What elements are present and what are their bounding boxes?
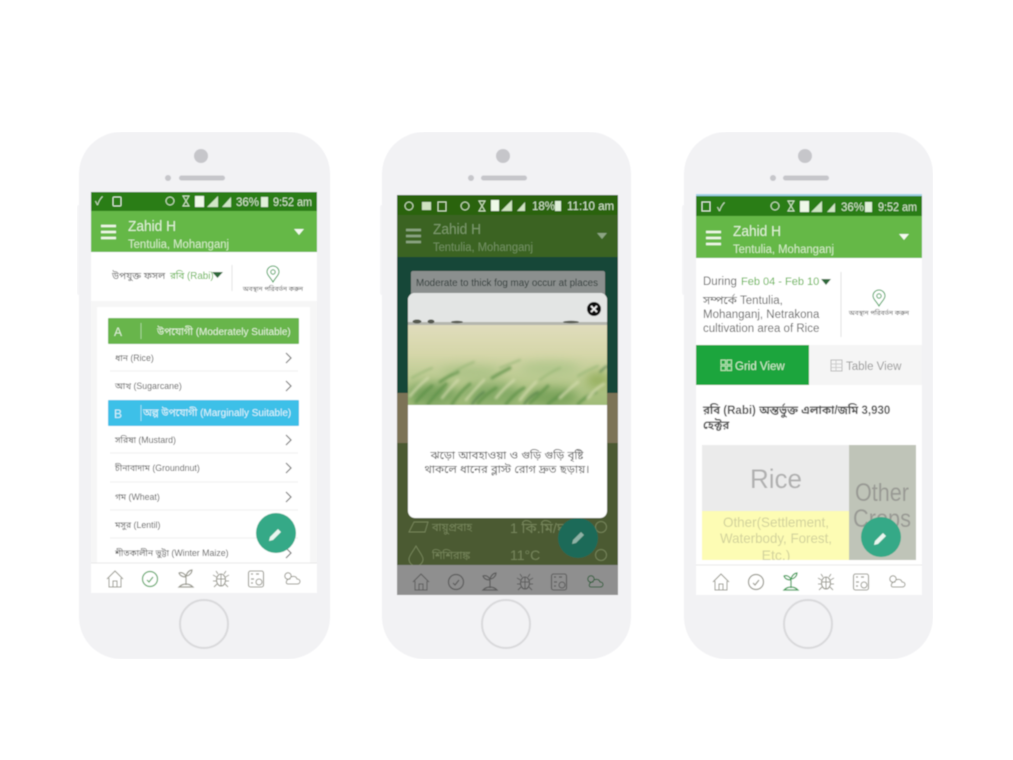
app header [696,216,922,258]
status bar: ✓ [717,202,725,214]
camera and speaker [468,149,527,181]
marginal crops: মসুর (Lentil) [114,520,161,531]
status bar: 9:52 am [878,202,917,214]
dimmed header [397,215,618,257]
date and location summary: অবস্থান পরিবর্তন করুন [848,309,909,317]
marginal crops: সরিষা (Mustard) [114,434,176,445]
treemap [702,445,916,563]
category B bar [108,400,299,426]
area heading: রবি (Rabi) অন্তর্ভুক্ত এলাকা/জমি 3,930 [702,403,890,417]
popup message [424,449,590,476]
phone body [77,132,330,659]
category A bar [108,318,299,344]
crop list card [97,307,310,563]
marginal crops: চীনাবাদাম (Groundnut) [114,462,200,473]
marginal crops: গম (Wheat) [115,492,160,502]
status bar: 18% [532,201,555,213]
camera and speaker [770,149,829,181]
status bar [696,194,922,216]
status bar: 9:52 am [273,197,312,209]
status bar [91,192,317,211]
dimmed header: Tentulia, Mohanganj [433,242,533,254]
status bar: ✓ [95,196,103,208]
season selector row: রবি (Rabi) [169,270,214,282]
dimmed bottom navigation [397,565,618,595]
home button [482,600,530,648]
app header [91,211,317,252]
view tabs [696,345,922,385]
popup card [406,293,610,518]
status bar: 36% [236,197,259,209]
date and location summary: cultivation area of Rice [703,323,819,335]
other crops block [849,445,916,560]
edit button [256,513,296,553]
view tabs: Grid View [735,361,785,373]
date and location summary: Feb 04 - Feb 10 [741,276,819,288]
screen [91,192,317,593]
date and location summary [702,272,909,337]
fog notice behind popup [411,271,605,301]
phone body [682,132,933,659]
bottom navigation [91,563,317,593]
wheat field photo [406,293,610,406]
home button [784,600,832,648]
phone 3: cultivation area treemap [682,132,933,659]
marginal crops [110,434,298,559]
dimmed weather rows: বায়ুপ্রবাহ [431,522,472,535]
dimmed edit button [558,518,598,558]
category A bar: A [114,325,122,339]
season selector row: উপযুক্ত ফসল [111,270,166,282]
other land block [702,511,849,563]
phone body [380,132,631,659]
dimmed screen [397,195,618,565]
other land block: Other(Settlement, [723,514,829,530]
status bar: 11:10 am [567,201,614,213]
phone 2: weather alert popup [380,132,631,659]
status bar: 36% [841,202,864,214]
category B bar: B [114,407,122,421]
season selector row [91,252,317,301]
app header: Tentulia, Mohanganj [128,239,229,251]
dimmed weather rows: 1 কি.মি/ঘ [510,520,566,536]
suitable crops [110,353,298,391]
season selector row: অবস্থান পরিবর্তন করুন [242,285,303,293]
close icon [587,302,601,316]
area heading: হেক্টর [703,419,730,432]
date and location summary: Mohanganj, Netrakona [703,309,820,321]
bottom navigation [696,565,922,595]
edit button [861,517,901,557]
dimmed weather rows: শিশিরাঙ্ক [431,549,470,562]
app header: Zahid H [128,218,176,235]
rice block [702,445,849,511]
other crops block: Other [855,479,909,507]
dimmed weather rows: 11°C [510,547,540,563]
marginal crops: শীতকালীন ভুট্টা (Winter Maize) [114,547,229,559]
other land block: Waterbody, Forest, [720,530,832,546]
camera and speaker [165,149,225,181]
suitable crops: আখ (Sugarcane) [114,381,182,391]
date and location summary: During [703,276,737,288]
date and location summary: সম্পর্কে Tentulia, [702,293,783,307]
screen [696,195,922,595]
other crops block: Crops [853,505,911,533]
other land block: Etc.) [762,547,790,563]
home button [180,600,228,648]
category A bar: উপযোগী (Moderately Suitable) [156,326,291,338]
area heading [702,403,890,432]
category B bar: অল্প উপযোগী (Marginally Suitable) [142,407,291,419]
phone 1: crop suitability list [77,132,330,659]
popup message: ঝড়ো আবহাওয়া ও গুড়ি গুড়ি বৃষ্টি [429,449,584,463]
dimmed header: Zahid H [433,221,481,238]
dimmed weather rows [409,520,606,566]
app header: Zahid H [733,223,781,240]
rice block: Rice [750,464,802,494]
status bar [397,195,618,215]
app header: Tentulia, Mohanganj [733,244,834,256]
popup message: থাকলে ধানের ব্লাস্ট রোগ দ্রুত ছড়ায়। [424,463,590,476]
view tabs: Table View [846,361,902,373]
fog notice behind popup: Moderate to thick fog may occur at places [416,278,598,289]
suitable crops: ধান (Rice) [115,353,154,363]
